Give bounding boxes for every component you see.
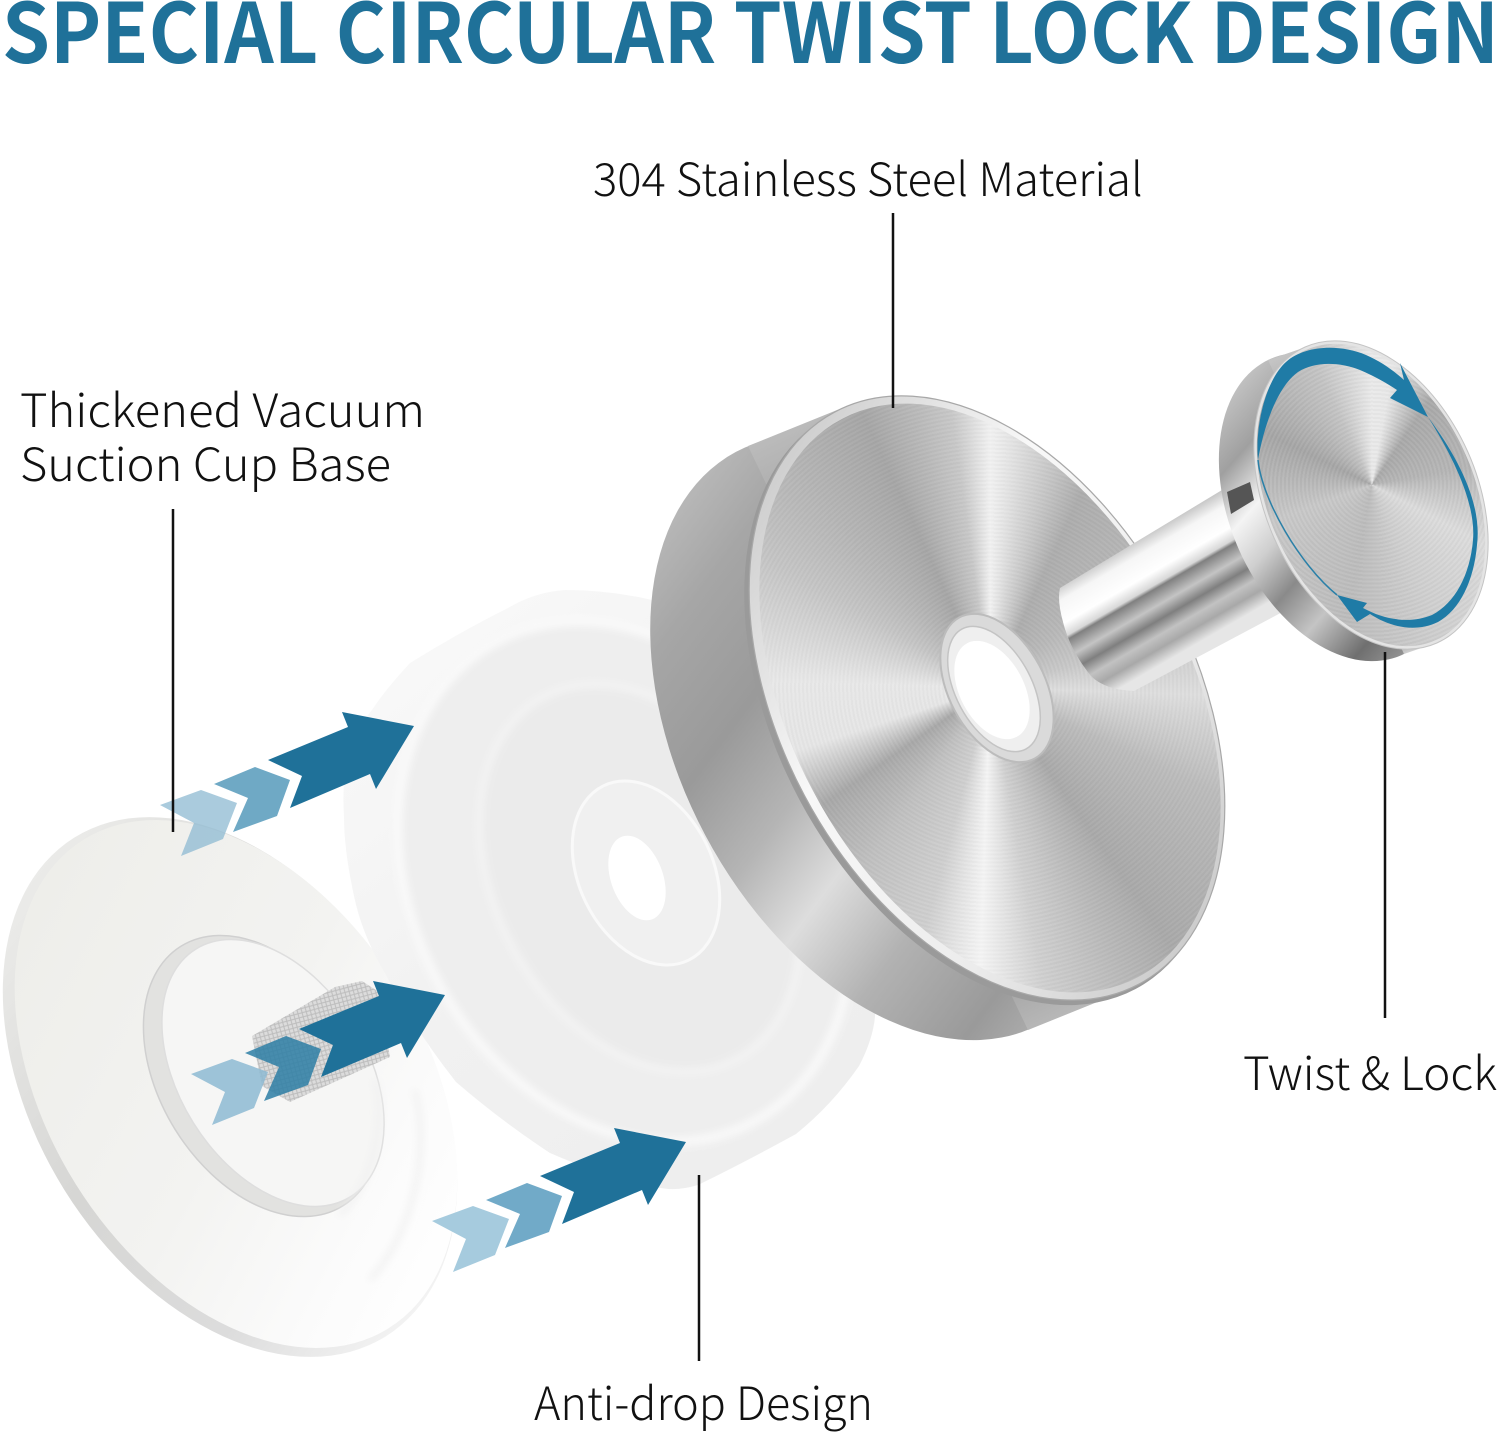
white disc outer ridge [310,542,940,1222]
steel disc side wall [553,355,1223,1121]
knob stem [1059,490,1290,691]
white disc hub ring [543,756,749,990]
leader line: stainless steel [892,213,894,408]
leader line: twist and lock [1384,652,1386,1018]
label: thickened vacuum suction cup base: Thickened Vacuum [20,375,425,441]
label: twist and lock: Twist & Lock [1243,1038,1497,1104]
steel disc brushed face [665,325,1315,1071]
steel disc centre hole [917,595,1077,781]
leader line: suction cup base [172,509,174,832]
white disc inner ridge [416,629,864,1127]
label: thickened vacuum suction cup base: Suction Cup Base [20,429,391,495]
arrow group: lower [432,1128,686,1272]
threaded screw [252,981,390,1102]
suction cup inner circle [94,892,430,1260]
twist knob hook [1059,304,1500,698]
white disc hole [598,828,676,928]
arrow group: upper [160,712,414,856]
suction cup glass reflections [340,1080,421,1280]
label: 304 stainless steel: 304 Stainless Steel Material [593,144,1143,210]
clear vacuum suction cup base [0,734,551,1433]
steel disc [553,315,1322,1121]
label: thickened vacuum suction cup base [20,375,425,495]
rotation arrow thin left line [1258,460,1337,595]
arrow group: middle [191,981,445,1125]
leader line: anti-drop [698,1175,700,1361]
steel disc step [647,317,1319,1087]
white anti-drop disc [310,542,940,1222]
knob rim [1208,304,1500,686]
knob brushed face [1212,308,1500,682]
rotation arrow bottom [1337,417,1478,628]
rotation arrow top [1258,348,1428,460]
label: anti-drop design: Anti-drop Design [534,1368,873,1433]
knob flange [1173,316,1499,698]
steel disc rim [652,315,1322,1081]
